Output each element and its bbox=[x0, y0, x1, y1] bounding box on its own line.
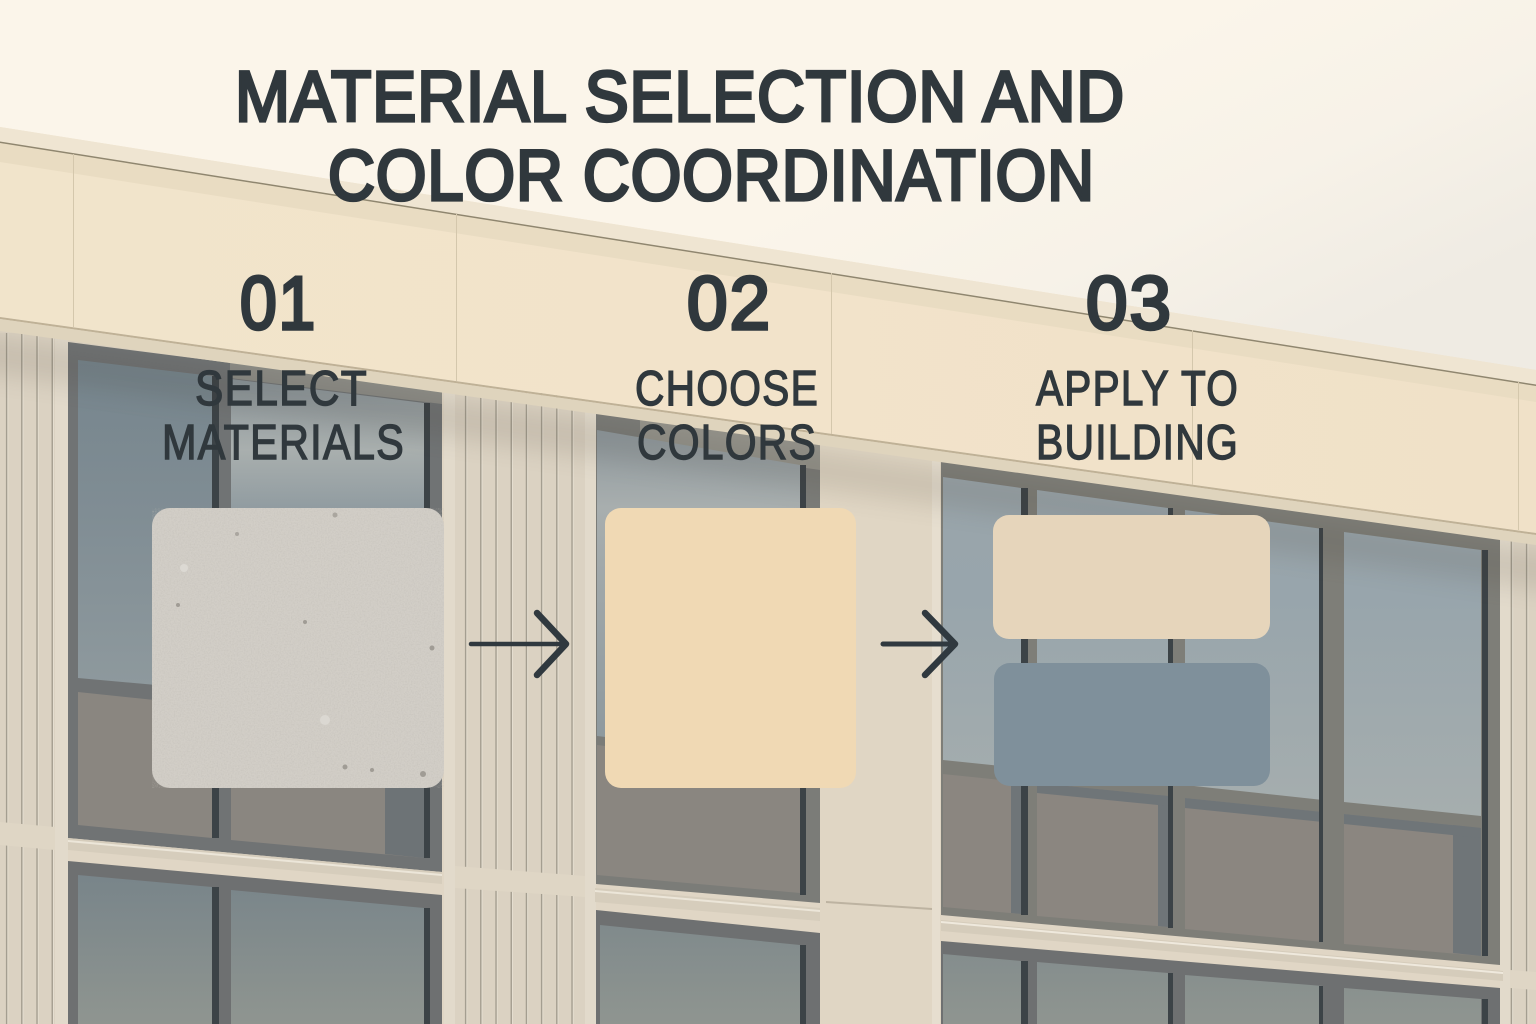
title: MATERIAL SELECTION AND bbox=[235, 58, 1125, 137]
step label: APPLY TO bbox=[1036, 362, 1239, 416]
material swatch bbox=[152, 508, 444, 788]
ribbed wall panels bbox=[0, 325, 1536, 1024]
window column 1 bbox=[68, 342, 442, 1024]
window column 3 bbox=[941, 460, 1503, 1024]
step label: SELECT bbox=[195, 362, 368, 416]
arrow: step 1 to step 2 bbox=[471, 613, 566, 675]
blue-grey applied swatch bbox=[994, 663, 1270, 786]
step label: MATERIALS bbox=[162, 416, 405, 470]
step label: CHOOSE bbox=[635, 362, 819, 416]
step label bbox=[1036, 362, 1239, 470]
arrow: step 2 to step 3 bbox=[883, 613, 955, 675]
step number 03: 03 bbox=[1086, 261, 1173, 345]
title bbox=[235, 58, 1125, 216]
step 3: apply to building bbox=[993, 261, 1270, 786]
roof fascia bbox=[0, 127, 1536, 545]
smooth wall panel bbox=[820, 440, 941, 1024]
shadow under fascia bbox=[0, 330, 1536, 595]
step number 02: 02 bbox=[687, 261, 772, 345]
step label bbox=[635, 362, 819, 470]
step label: COLORS bbox=[637, 416, 817, 470]
window column 2 bbox=[595, 408, 820, 1024]
step label bbox=[162, 362, 405, 470]
wall base bbox=[0, 317, 1536, 1024]
step 1: select materials bbox=[152, 261, 444, 788]
step number 01: 01 bbox=[240, 261, 317, 345]
title: COLOR COORDINATION bbox=[328, 137, 1095, 216]
color swatch bbox=[605, 508, 856, 788]
step 2: choose colors bbox=[605, 261, 856, 788]
step label: BUILDING bbox=[1036, 416, 1239, 470]
beige applied swatch bbox=[993, 515, 1270, 639]
